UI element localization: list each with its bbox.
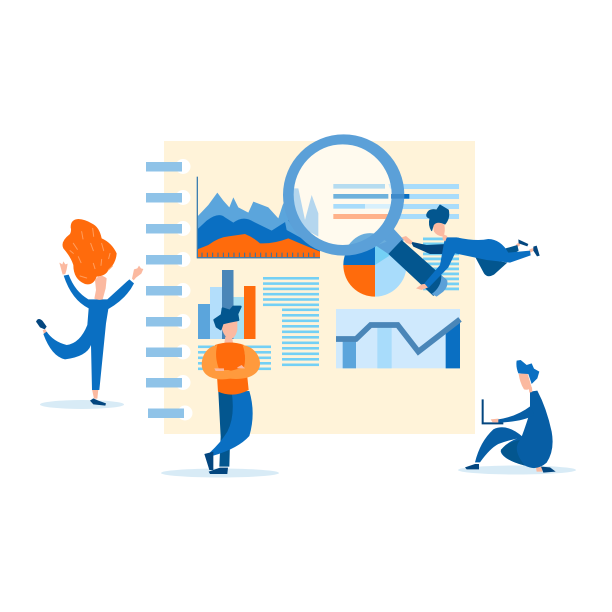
neck — [529, 387, 532, 393]
area chart — [197, 177, 320, 258]
bar chart — [198, 270, 256, 339]
neck — [443, 234, 447, 241]
shoes — [36, 319, 106, 406]
hair highlights — [70, 228, 112, 278]
arms — [202, 345, 237, 379]
shoes — [465, 464, 556, 473]
body — [501, 391, 553, 468]
handle end cap — [432, 275, 447, 297]
text lines: lower right of bar chart — [282, 308, 319, 366]
hair — [516, 360, 539, 384]
text rows at top right — [333, 184, 459, 219]
face — [94, 276, 107, 300]
standing man with crossed arms — [202, 307, 260, 474]
magnifier handle — [388, 240, 447, 296]
panel: notebook page — [164, 141, 475, 434]
seated man with laptop — [465, 360, 556, 473]
torso — [215, 342, 249, 395]
ground shadows — [40, 400, 576, 478]
shoes — [204, 452, 228, 474]
woman with red hair — [36, 219, 143, 406]
dark cape leg — [475, 257, 507, 276]
laptop — [482, 399, 503, 424]
back arm — [411, 242, 447, 254]
hands — [402, 236, 534, 290]
near leg — [475, 427, 523, 462]
highlighted row across ring — [391, 194, 409, 199]
face — [519, 373, 532, 390]
hair — [214, 307, 241, 329]
hands and ankles — [43, 261, 143, 399]
body and limbs — [43, 275, 134, 390]
hair — [427, 205, 449, 231]
pie chart — [343, 233, 407, 297]
neck — [224, 337, 233, 345]
text lines behind flying figure — [423, 238, 459, 290]
notebook spiral binding — [146, 159, 192, 420]
arm — [498, 406, 534, 423]
magnifier neck — [375, 227, 404, 254]
hand — [491, 419, 500, 422]
body and front arm — [424, 237, 531, 288]
hair — [62, 219, 117, 284]
flying man holding magnifier — [402, 205, 540, 290]
lens contents — [283, 184, 395, 247]
text lines: upper right of bar chart — [263, 277, 319, 306]
shoes — [518, 239, 540, 256]
text lines: behind standing man — [198, 346, 271, 370]
hands — [214, 365, 245, 371]
trousers — [218, 392, 235, 467]
face — [221, 320, 237, 339]
lens glass — [293, 144, 393, 246]
face — [433, 222, 445, 237]
lens ring — [283, 134, 404, 256]
leg shadow — [501, 440, 525, 466]
magnifying glass — [283, 134, 447, 297]
ankle — [536, 467, 542, 472]
line and column chart — [336, 309, 460, 368]
